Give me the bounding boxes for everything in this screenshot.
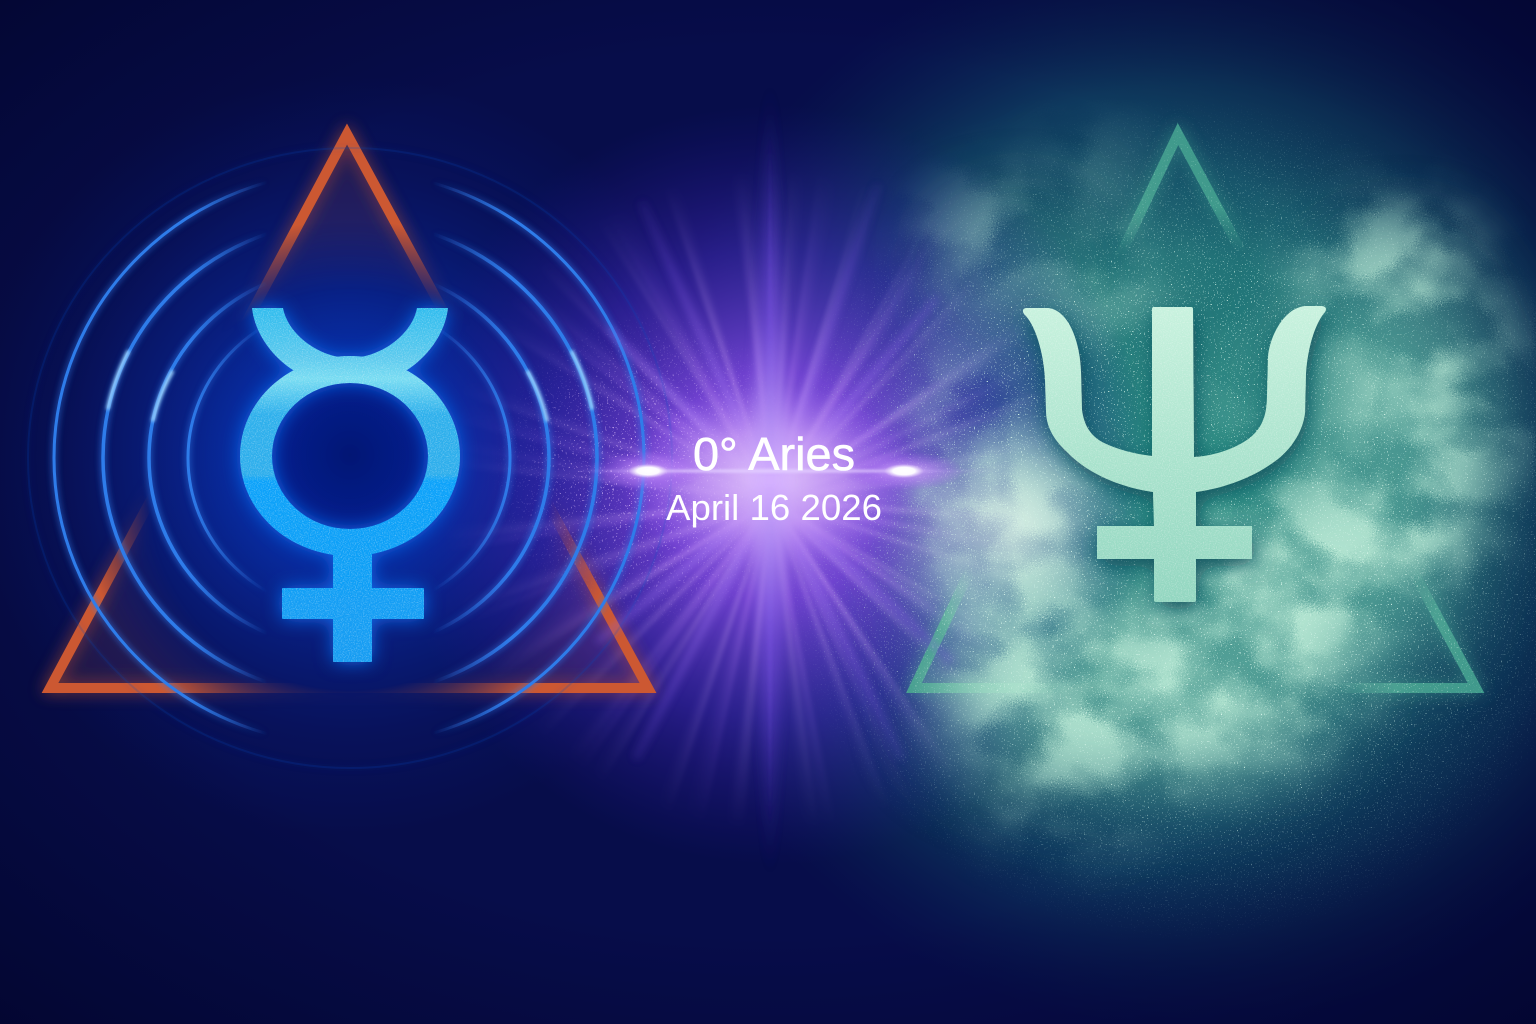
starburst rays [493, 206, 1023, 788]
centre starburst core glow [620, 383, 920, 573]
inner glow behind Mercury [180, 285, 520, 625]
icon: Mercury glyph [240, 308, 460, 662]
left triangle: fire trine in orange [50, 134, 648, 688]
bright highlight in the cloud beside the flare [925, 480, 1075, 570]
bright highlights on the rings [108, 352, 592, 420]
right triangle: water trine, teal and fading into the cloud [914, 134, 1476, 688]
main artwork [27, 108, 1536, 934]
soft haze beneath the cloud [920, 220, 1490, 780]
vertical light streak [750, 70, 790, 890]
horizontal light streak with two flare nodes [540, 451, 1010, 491]
long diagonal rays of the starburst [600, 188, 950, 756]
concentric signal rings around Mercury [28, 148, 672, 768]
dust particles around the cloud [787, 105, 1536, 934]
icon: Neptune trident glyph [1023, 306, 1326, 602]
violet star particles near the centre-left [497, 317, 759, 622]
title: degree and sign: 0° Aries [693, 428, 855, 480]
date label: April 16 2026 [666, 487, 882, 528]
cloud of teal smoke around Neptune [880, 121, 1536, 866]
